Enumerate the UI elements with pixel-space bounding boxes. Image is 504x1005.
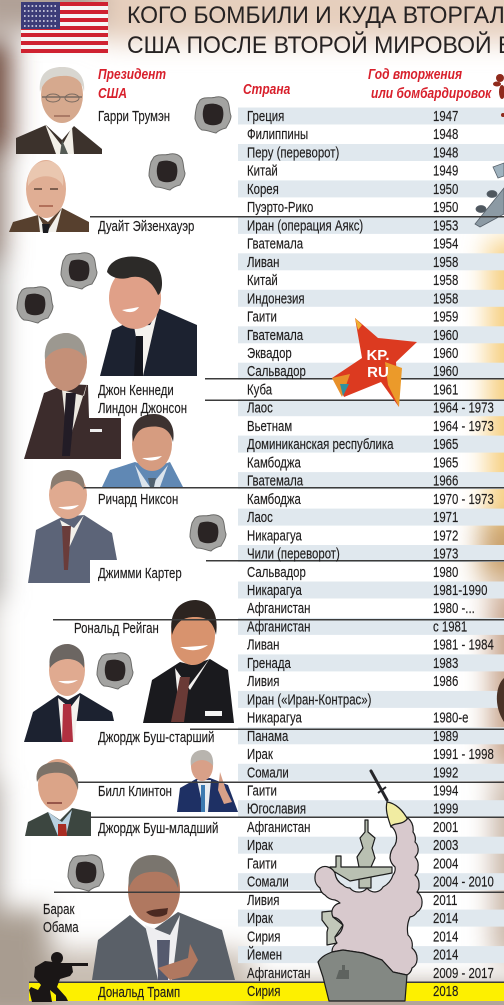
year column: 1980-е <box>433 709 468 726</box>
year column: 1980 -... <box>433 600 475 617</box>
country column: Камбоджа <box>247 490 301 507</box>
year column: 2011 <box>433 891 458 908</box>
flag <box>21 2 108 53</box>
portrait: Bush Jr <box>25 759 91 836</box>
year column: 2004 <box>433 855 459 872</box>
year column: 1981-1990 <box>433 581 487 598</box>
country column: Гватемала <box>247 235 304 252</box>
year column: 1950 <box>433 199 458 216</box>
year column: 1958 <box>433 272 458 288</box>
country column: Ливия <box>247 891 279 908</box>
bullet holes <box>17 97 231 891</box>
year column: 1973 <box>433 545 458 562</box>
year column: 1948 <box>433 144 458 161</box>
country column: Вьетнам <box>247 417 292 434</box>
year column: 1953 <box>433 217 458 234</box>
president names: Билл Клинтон <box>98 782 172 799</box>
president names: Джордж Буш-младший <box>98 819 218 836</box>
table bands <box>238 108 504 963</box>
portrait: Reagan <box>143 600 234 723</box>
president names: Линдон Джонсон <box>98 399 187 416</box>
year column: 2014 <box>433 928 459 945</box>
right edge art: dark portrait fragment <box>497 678 504 722</box>
country column: Гватемала <box>247 472 304 489</box>
country column: Ирак <box>247 910 273 926</box>
president names: Джимми Картер <box>98 564 182 581</box>
year column: 2001 <box>433 818 458 835</box>
portrait: Truman <box>16 67 102 154</box>
portrait: Obama <box>92 855 235 980</box>
president names: Ричард Никсон <box>98 490 178 507</box>
country column: Афганистан <box>247 618 310 635</box>
country column: Никарагуа <box>247 527 302 544</box>
country column: Гаити <box>247 308 277 325</box>
table header: president <box>98 66 166 101</box>
country column: Югославия <box>247 800 306 817</box>
country column: Перу (переворот) <box>247 144 339 161</box>
country column: Камбоджа <box>247 454 301 471</box>
country column: Индонезия <box>247 290 305 307</box>
year column: 1965 <box>433 436 458 452</box>
year column: 2018 <box>433 982 458 999</box>
year column: 1960 <box>433 326 458 343</box>
country column: Никарагуа <box>247 581 302 598</box>
country column: Афганистан <box>247 600 310 617</box>
year column: 1958 <box>433 290 458 307</box>
country column: Ирак <box>247 746 273 762</box>
year column: 2014 <box>433 946 459 963</box>
country column: Греция <box>247 107 284 124</box>
country column: Лаос <box>247 399 273 416</box>
icon: kneeling soldier <box>29 952 88 1002</box>
president names: Обама <box>43 918 79 935</box>
portrait: Johnson <box>24 333 121 459</box>
country column: Йемен <box>247 946 282 963</box>
year column: 1948 <box>433 126 458 143</box>
year column: 1986 <box>433 673 458 689</box>
right edge art: bomber plane <box>475 163 504 227</box>
year column: с 1981 <box>433 618 467 635</box>
table header: country: Страна <box>243 81 291 97</box>
portrait: Carter <box>28 470 117 583</box>
year column: 1966 <box>433 472 458 489</box>
country column <box>247 107 394 999</box>
title <box>127 1 504 59</box>
table header: year <box>368 66 492 101</box>
year column: 1980 <box>433 563 458 580</box>
president names <box>43 107 218 1000</box>
portrait: Nixon <box>102 414 183 487</box>
year column: 1992 <box>433 764 458 781</box>
country column: Афганистан <box>247 818 310 835</box>
president names: Джордж Буш-старший <box>98 728 214 745</box>
table header: president: США <box>98 85 127 101</box>
country column: Китай <box>247 272 278 288</box>
year column: 2004 - 2010 <box>433 873 494 890</box>
highlighted row: Trump <box>29 983 504 1001</box>
president names: Дональд Трамп <box>98 983 180 1000</box>
country column: Ливан <box>247 636 279 653</box>
year column: 1949 <box>433 162 458 179</box>
year column: 1960 <box>433 363 458 380</box>
country column: Куба <box>247 381 273 398</box>
country column: Чили (переворот) <box>247 545 340 562</box>
right edge art: red splash <box>493 74 504 117</box>
year column: 2014 <box>433 910 459 926</box>
year column <box>433 107 494 999</box>
president names: Гарри Трумэн <box>98 107 170 124</box>
president names: Джон Кеннеди <box>98 381 174 398</box>
country column: Сирия <box>247 928 280 945</box>
logo: KP.RU star: KP. <box>366 347 390 364</box>
year column: 1989 <box>433 727 458 744</box>
country column: Лаос <box>247 509 273 525</box>
country column: Сальвадор <box>247 363 306 380</box>
year column: 1972 <box>433 527 458 544</box>
year column: 1961 <box>433 381 458 398</box>
country column: Ливан <box>247 253 279 270</box>
country column: Никарагуа <box>247 709 302 726</box>
country column: Филиппины <box>247 126 308 143</box>
year column: 1991 - 1998 <box>433 746 494 762</box>
country column: Иран («Иран-Контрас») <box>247 691 371 708</box>
year column: 2003 <box>433 837 458 854</box>
country column: Сальвадор <box>247 563 306 580</box>
year column: 1964 - 1973 <box>433 417 494 434</box>
country column: Ирак <box>247 837 273 854</box>
year column: 1965 <box>433 454 458 471</box>
country column: Гватемала <box>247 326 304 343</box>
country column: Иран (операция Аякс) <box>247 217 363 234</box>
year column: 1954 <box>433 235 459 252</box>
country column: Панама <box>247 727 289 744</box>
year column: 1950 <box>433 180 458 197</box>
missile <box>371 771 387 800</box>
country column: Гаити <box>247 782 277 799</box>
table header: president: Президент <box>98 66 166 82</box>
ship and smoke illustration <box>315 802 422 1001</box>
logo: KP.RU star: RU <box>367 364 389 381</box>
president dividers <box>29 216 504 983</box>
year column: 1971 <box>433 509 458 525</box>
president names: Барак <box>43 900 75 917</box>
portrait: Kennedy <box>100 257 197 376</box>
year column: 1970 - 1973 <box>433 490 494 507</box>
country column: Сомали <box>247 873 289 890</box>
country column: Эквадор <box>247 344 292 361</box>
portrait: Clinton <box>177 750 238 812</box>
country column: Сомали <box>247 764 289 781</box>
year column: 1959 <box>433 308 458 325</box>
year column: 1981 - 1984 <box>433 636 494 653</box>
year column: 1958 <box>433 253 458 270</box>
country column: Гаити <box>247 855 277 872</box>
portrait: Eisenhower <box>9 160 89 233</box>
country column: Доминиканская республика <box>247 436 394 452</box>
country column: Пуэрто-Рико <box>247 199 313 216</box>
year column: 1960 <box>433 344 458 361</box>
logo: KP.RU star <box>332 318 417 407</box>
year column: 1964 - 1973 <box>433 399 494 416</box>
country column: Ливия <box>247 673 279 689</box>
year column: 1947 <box>433 107 458 124</box>
country column: Сирия <box>247 982 280 999</box>
portrait: Bush Sr <box>24 644 114 742</box>
table header: year: или бомбардировок <box>371 85 492 101</box>
president names: Рональд Рейган <box>74 619 159 636</box>
country column: Афганистан <box>247 964 310 981</box>
country column: Гренада <box>247 654 291 671</box>
year column: 1983 <box>433 654 458 671</box>
year column: 1994 <box>433 782 459 799</box>
year column: 1999 <box>433 800 458 817</box>
country column: Китай <box>247 162 278 179</box>
table header: year: Год вторжения <box>368 66 462 82</box>
year column: 2009 - 2017 <box>433 964 494 981</box>
country column: Корея <box>247 180 279 197</box>
president names: Дуайт Эйзенхауэр <box>98 217 194 234</box>
